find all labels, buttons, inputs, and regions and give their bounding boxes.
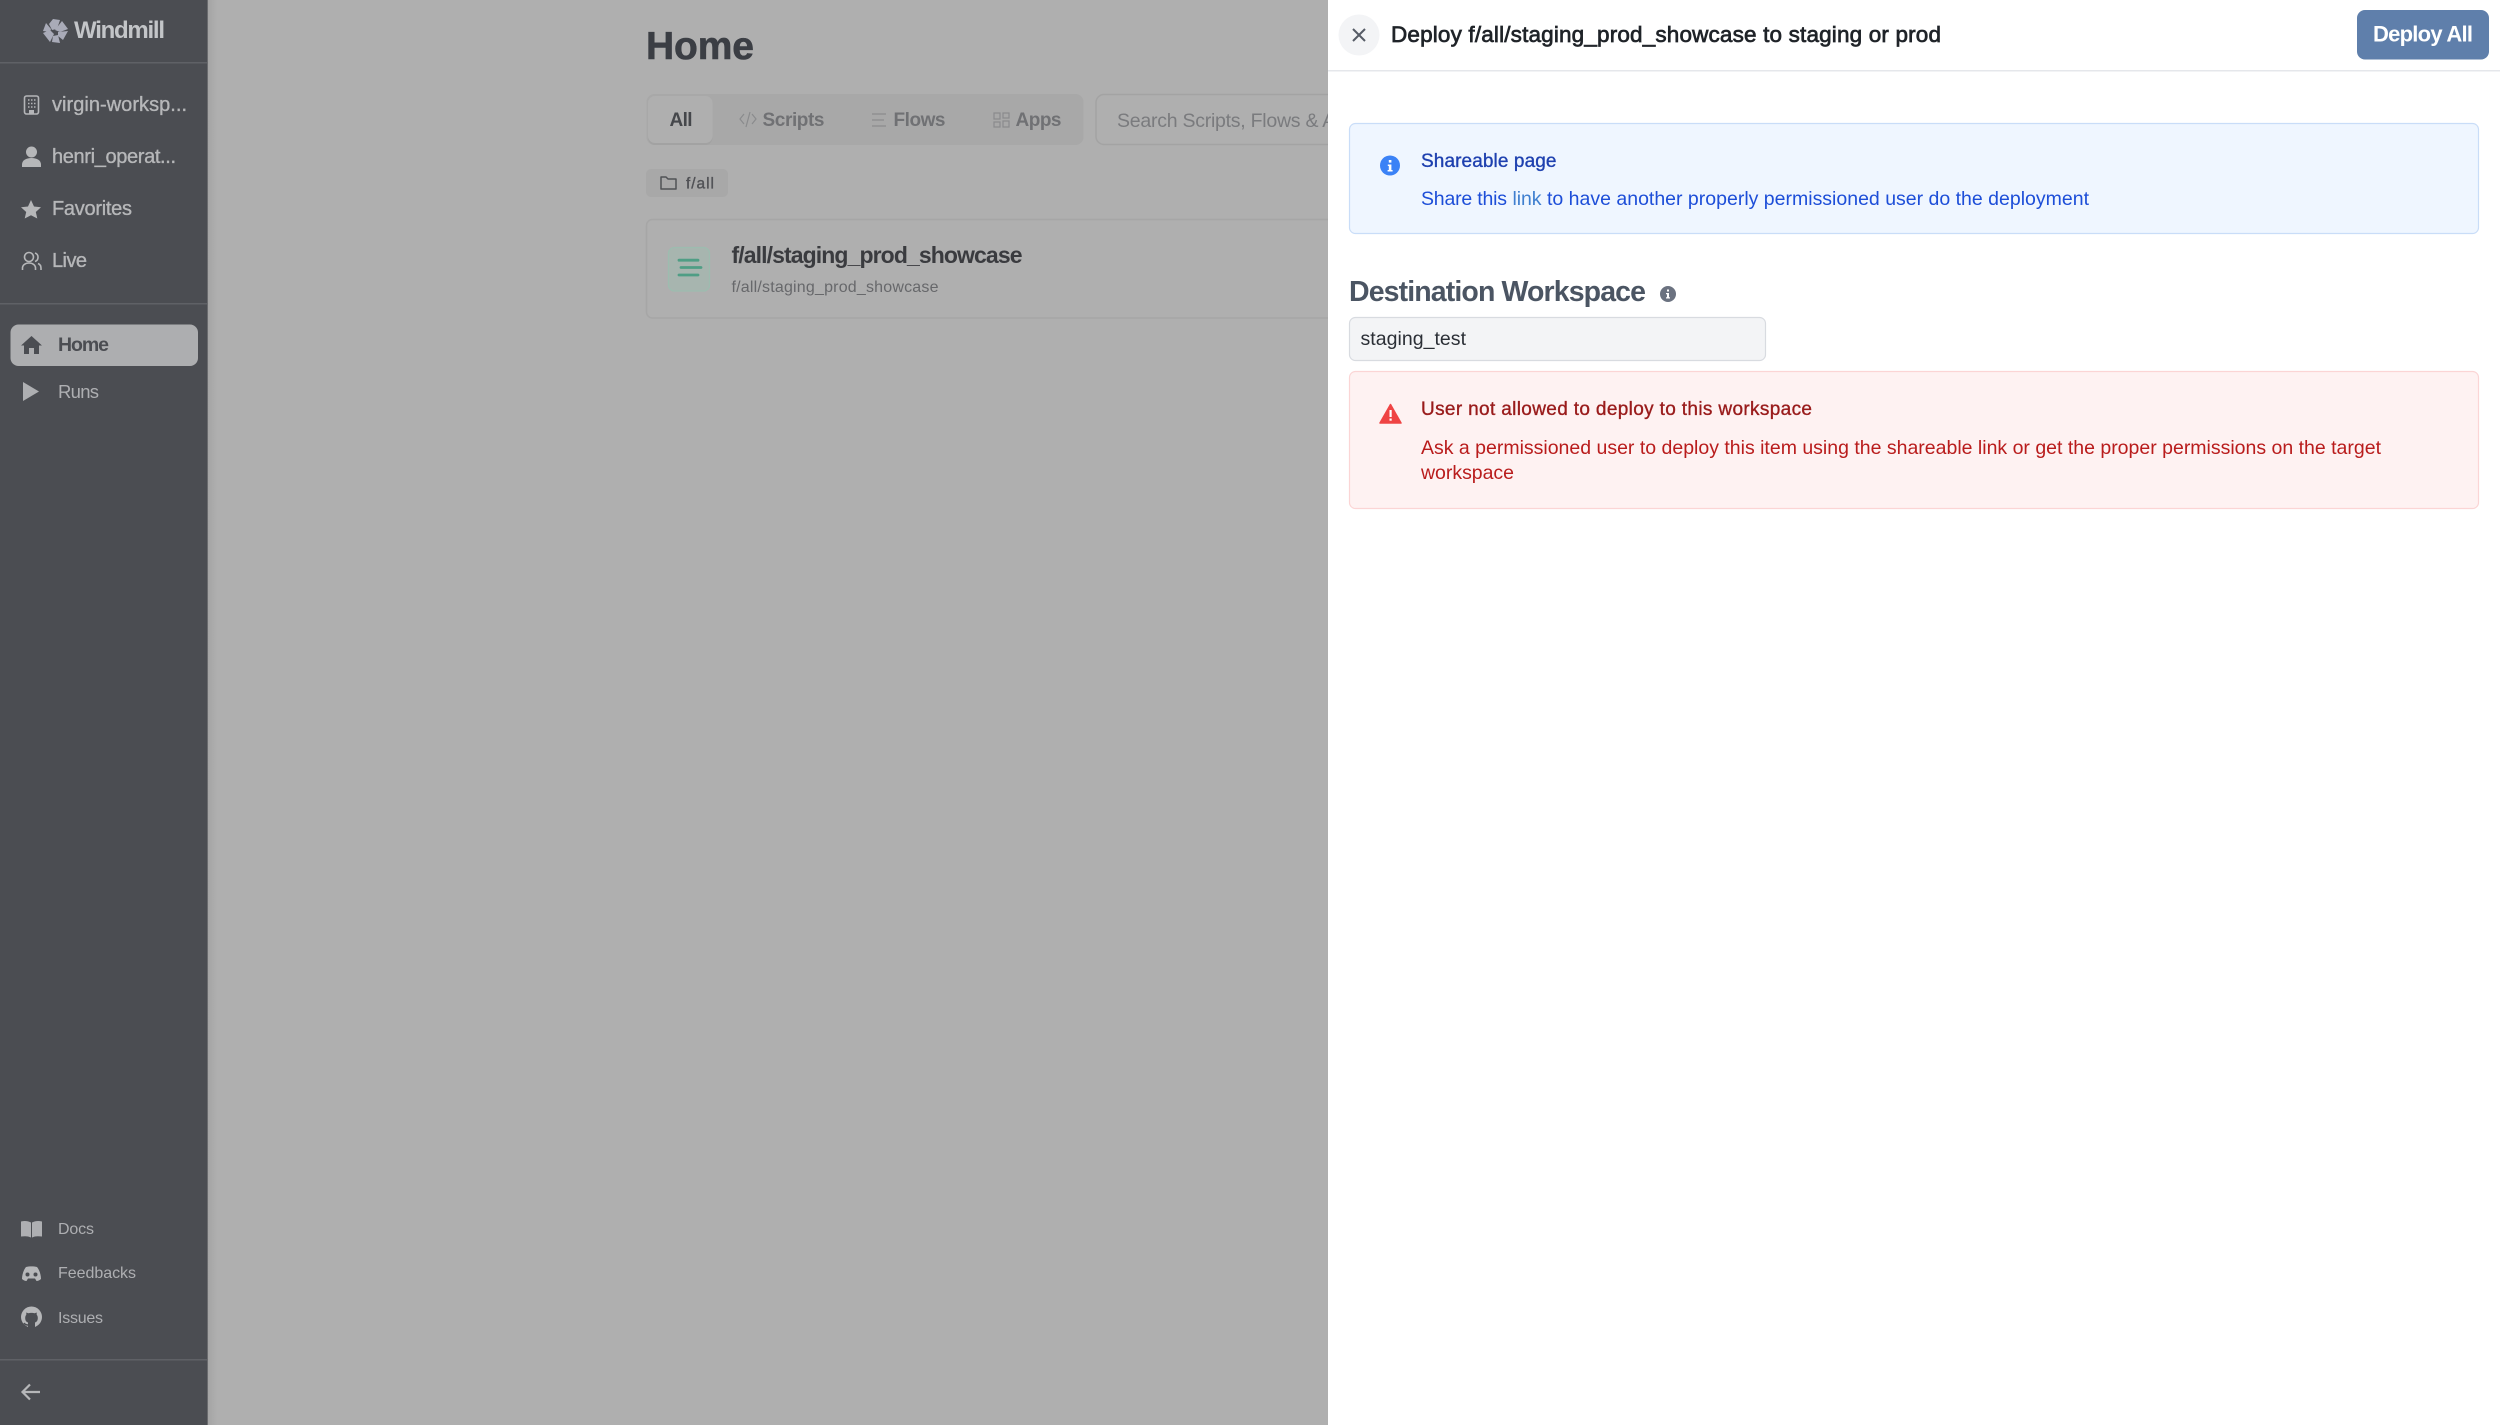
link: docs [21, 1221, 94, 1238]
search box: Search Scripts, Flows & Apps [1117, 110, 1366, 132]
tab: Apps [994, 112, 1061, 130]
nav item: workspace: virgin-worksp... [52, 94, 187, 116]
icon: info small [1660, 286, 1676, 302]
nav item: user: henri_operat... [52, 146, 176, 168]
drawer header [1328, 10, 2500, 72]
callout body: to have another properly permissioned user do the deployment [1547, 188, 2090, 210]
panel: deploy drawer [1328, 0, 2500, 1425]
nav item: runs: Runs [58, 381, 99, 402]
card path: f/all/staging_prod_showcase [732, 279, 939, 296]
button: close [1338, 14, 1380, 56]
error body: workspace [1420, 462, 1514, 484]
tab: Flows [872, 112, 945, 126]
nav item: home (active) [10, 324, 198, 366]
logo: Windmill: Windmill [74, 17, 165, 44]
card: staging_prod_showcase [646, 219, 1328, 318]
card title: f/all/staging_prod_showcase [732, 242, 1022, 268]
tab: Flows: Flows [894, 110, 946, 131]
link: feedbacks: Feedbacks [58, 1265, 136, 1282]
link: issues [21, 1306, 103, 1328]
link: docs: Docs [58, 1221, 94, 1238]
button: Deploy All: Deploy All [2373, 22, 2473, 46]
error body [1420, 437, 2382, 484]
callout body: Share this [1421, 188, 1507, 210]
tab: Apps: Apps [1016, 110, 1062, 131]
link: issues: Issues [58, 1310, 103, 1327]
error body: Ask a permissioned user to deploy this item using the shareable link or get the proper permissions on the target [1421, 437, 2382, 459]
input: workspace: staging_test [1360, 328, 1467, 350]
callout: error [1350, 372, 2478, 508]
button: Deploy All [2357, 10, 2489, 60]
nav item: home (active): Home [58, 334, 109, 356]
nav item: live [22, 250, 87, 272]
link: feedbacks [22, 1265, 136, 1282]
nav item: runs [23, 381, 99, 402]
main page background [208, 0, 1328, 1425]
icon: flow [668, 248, 710, 291]
heading: Destination Workspace: Destination Workspace [1349, 276, 1646, 308]
icon: warning [1380, 404, 1401, 423]
input: workspace [1350, 318, 1766, 360]
drawer title: Deploy f/all/staging_prod_showcase to staging or prod [1391, 22, 1941, 47]
panel: home content [646, 32, 1328, 318]
panel: sidebar [0, 0, 208, 1425]
tabs [648, 112, 1061, 145]
callout: shareable page [1350, 124, 2478, 234]
tab: All [670, 112, 692, 126]
tab: Scripts [740, 112, 824, 130]
nav item: live: Live [52, 250, 87, 272]
chip: f/all [660, 176, 714, 190]
callout: error: User not allowed to deploy to this workspace [1421, 399, 1812, 420]
icon: info [1380, 156, 1400, 176]
tab: Scripts: Scripts [762, 110, 824, 131]
search box [1096, 94, 1328, 145]
heading: Home: Home [646, 25, 754, 68]
callout body: link [1512, 188, 1542, 210]
icon: collapse arrow [22, 1384, 40, 1400]
chip: f/all: f/all [686, 176, 714, 192]
callout: shareable page: Shareable page [1421, 151, 1556, 172]
tab: All: All [670, 110, 692, 131]
nav item: favorites: Favorites [52, 198, 132, 220]
